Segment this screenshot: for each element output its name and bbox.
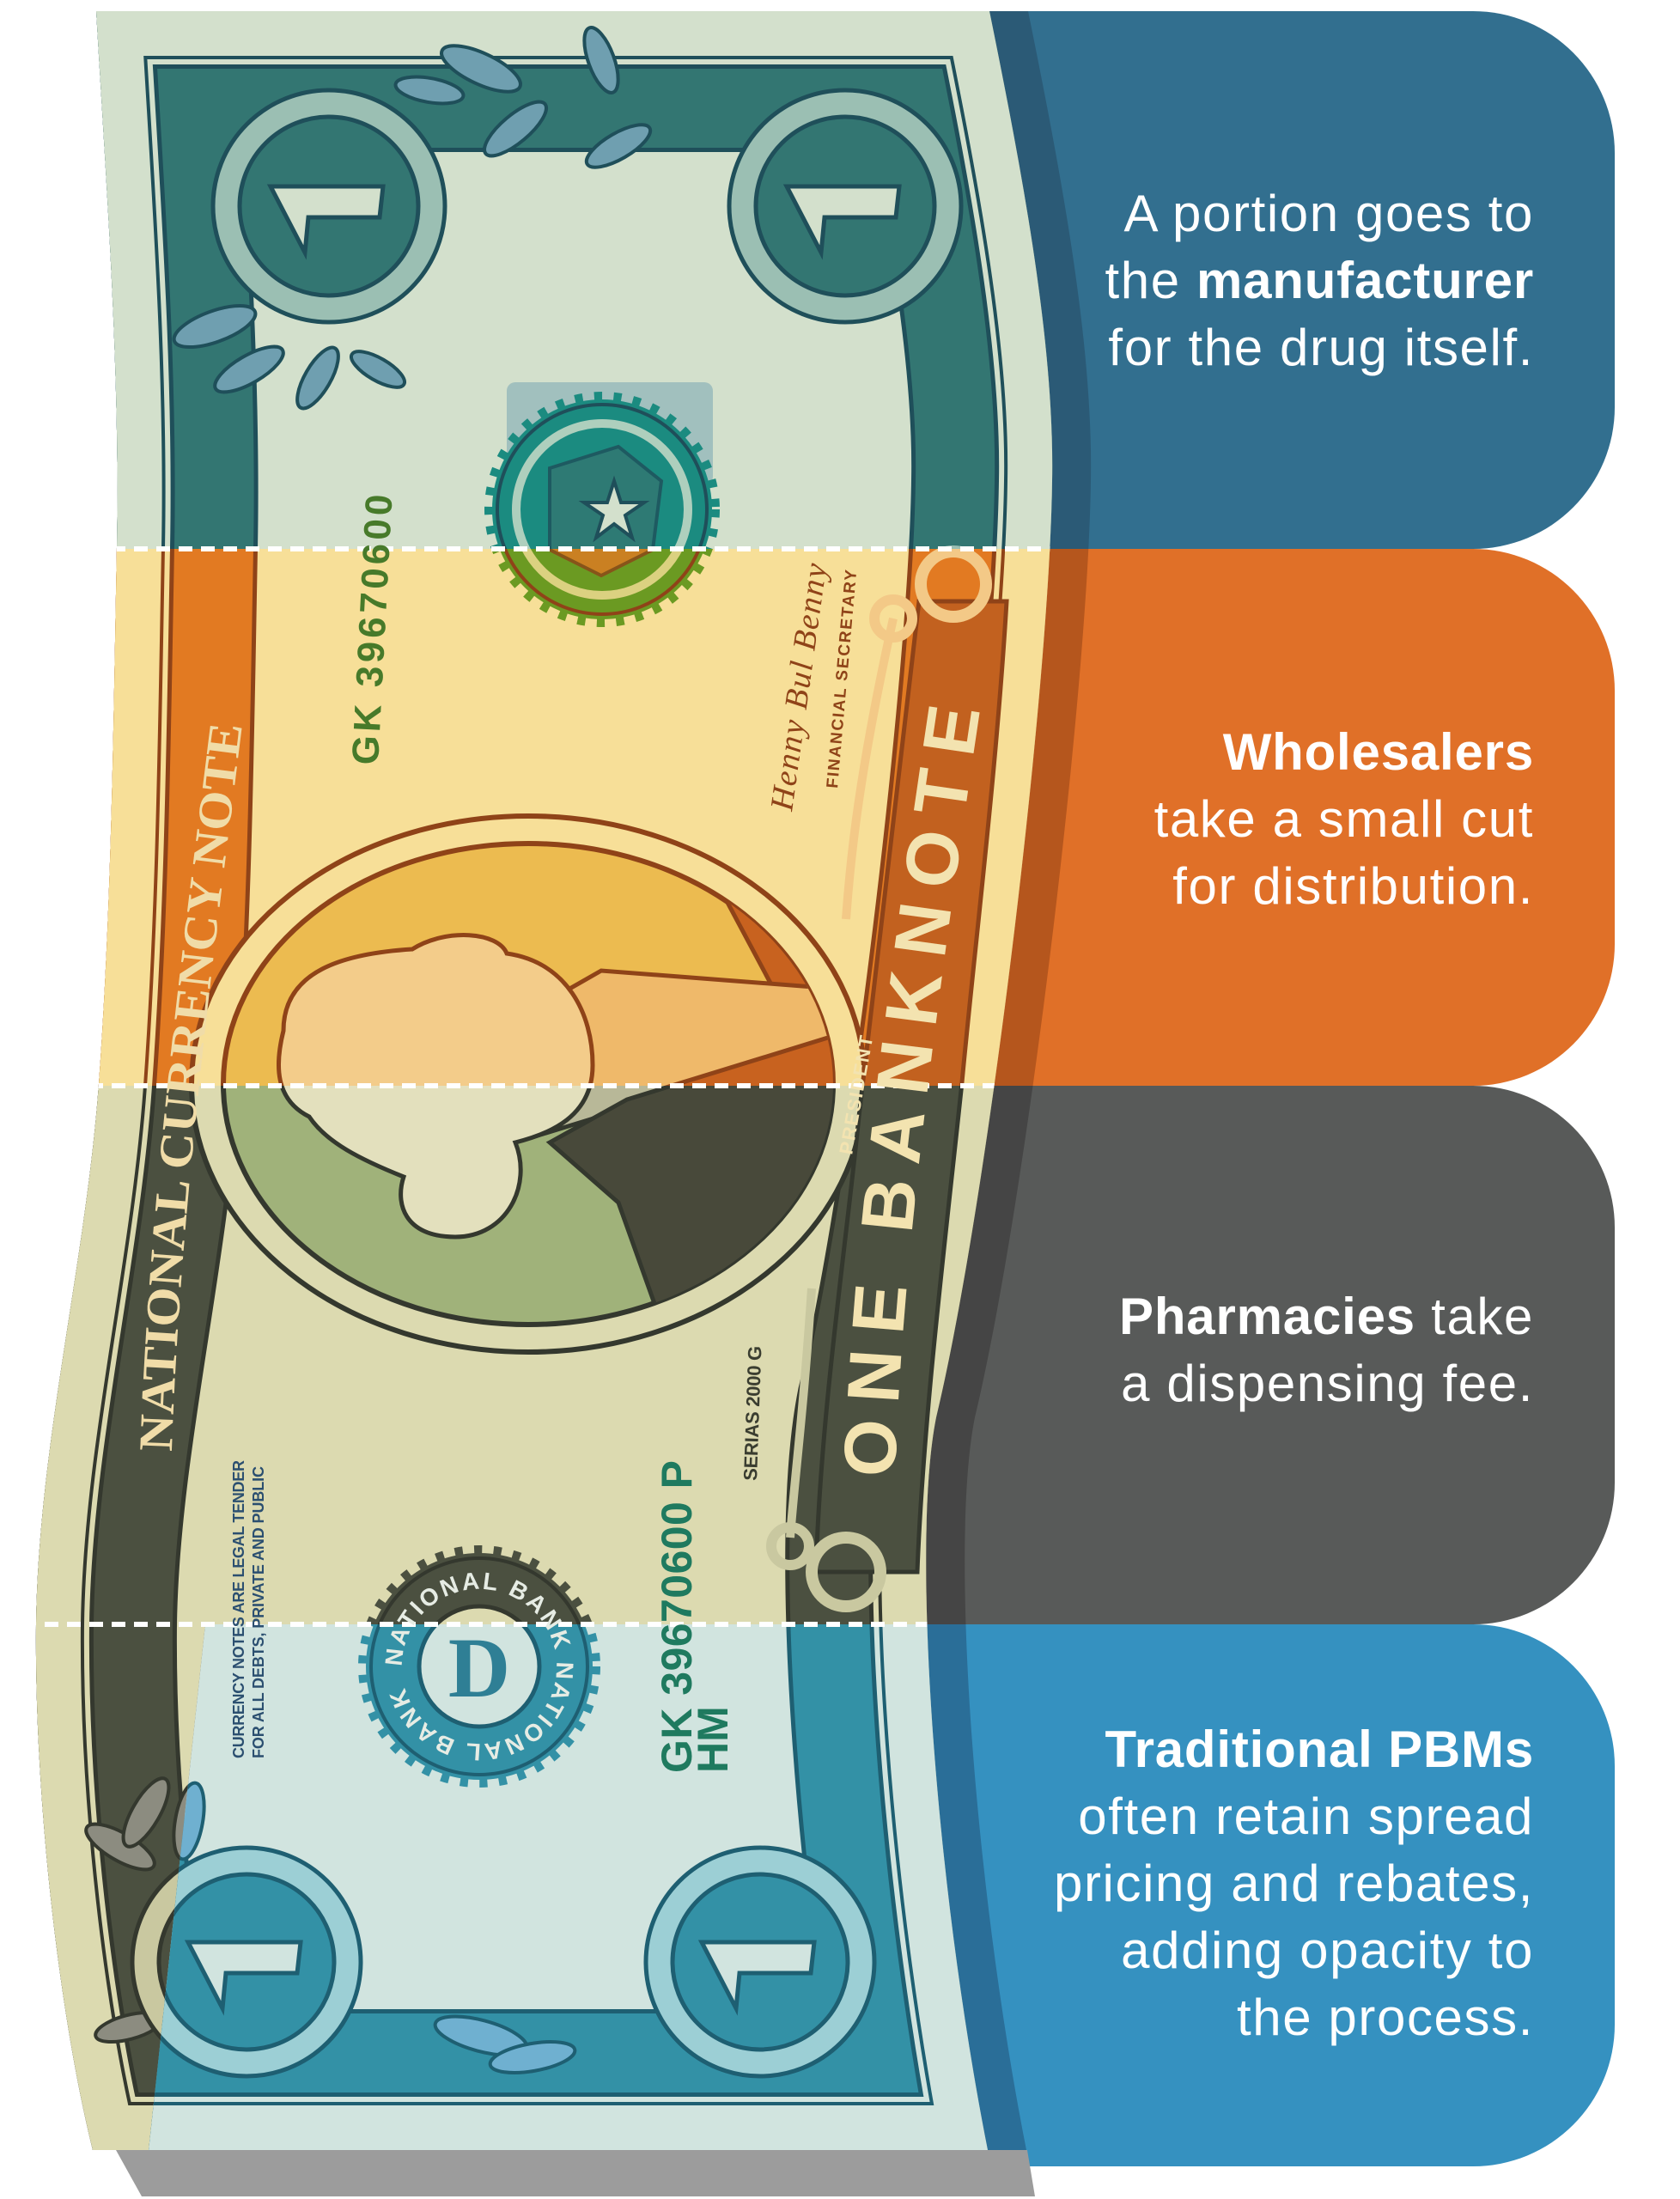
panel text: manufacturer: the manufacturer <box>1105 252 1534 309</box>
panel text: traditional PBMs: Traditional PBMs <box>1105 1721 1534 1778</box>
panel 1: manufacturer (dark blue) <box>859 11 1615 549</box>
banknote text: NATIONAL CURRENCY NOTE: NATIONAL CURRENCY NOTE <box>140 726 242 1451</box>
panel 3: pharmacies (gray) <box>859 1086 1615 1624</box>
serial number top: GK 39670600 <box>344 493 400 766</box>
banknote text: ONE BANKNOTE: ONE BANKNOTE <box>844 706 979 1474</box>
panel text: pharmacies <box>1119 1288 1534 1412</box>
bottom seal lettering: NATIONAL BANK NATIONAL BANK <box>385 1572 574 1761</box>
panel text: traditional PBMs: pricing and rebates, <box>1054 1855 1534 1912</box>
bottom seal lettering: D <box>448 1620 510 1715</box>
serial suffix HM: HM <box>689 1706 737 1773</box>
panel text: wholesalers <box>1154 723 1534 915</box>
serias: SERIAS 2000 G <box>740 1345 765 1481</box>
legal tender text <box>230 1460 267 1758</box>
panel text: traditional PBMs: adding opacity to <box>1121 1922 1534 1979</box>
bill shadow below <box>116 2150 1035 2196</box>
panel text: manufacturer: for the drug itself. <box>1108 319 1534 376</box>
legal tender text: CURRENCY NOTES ARE LEGAL TENDER <box>230 1460 247 1758</box>
legal tender text: FOR ALL DEBTS, PRIVATE AND PUBLIC <box>250 1466 267 1758</box>
panel text: pharmacies: a dispensing fee. <box>1121 1355 1534 1412</box>
panel text: pharmacies: Pharmacies take <box>1119 1288 1534 1345</box>
panel text: traditional PBMs <box>1054 1721 1534 2046</box>
banknote text: PRESIDENT: PRESIDENT <box>835 1033 877 1156</box>
bill side shadow strip <box>185 11 1091 2150</box>
financial secretary: FINANCIAL SECRETARY <box>824 569 861 789</box>
panel 2: wholesalers (orange) <box>859 549 1615 1086</box>
panel text: wholesalers: for distribution. <box>1172 857 1534 915</box>
panel text: manufacturer: A portion goes to <box>1123 185 1534 242</box>
panel text: wholesalers: Wholesalers <box>1223 723 1534 781</box>
panel text: manufacturer <box>1105 185 1534 376</box>
panel text: traditional PBMs: often retain spread <box>1078 1788 1534 1845</box>
banknote illustration <box>36 11 1052 2150</box>
signature: Henny Bul Benny <box>764 561 834 813</box>
panel text: wholesalers: take a small cut <box>1154 790 1534 848</box>
panel 4: PBMs (light blue) <box>859 1624 1615 2166</box>
dashed band dividers <box>0 549 1117 1624</box>
serial number bottom: GK 39670600 P <box>653 1460 701 1773</box>
panel text: traditional PBMs: the process. <box>1237 1989 1534 2046</box>
